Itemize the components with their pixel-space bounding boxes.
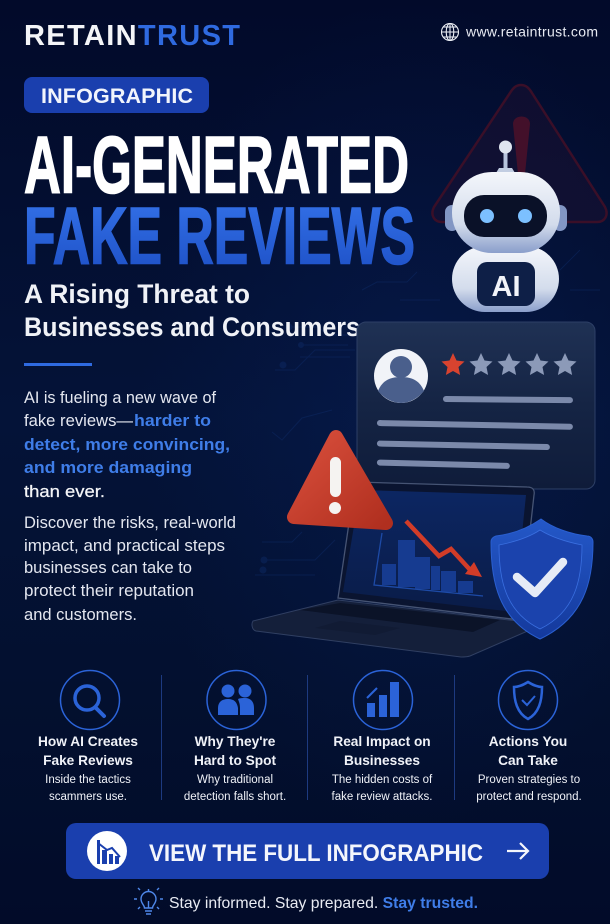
icon: rising bars <box>354 670 412 730</box>
intro text block <box>24 388 230 501</box>
description text block: Discover the risks, real-world <box>24 514 236 532</box>
intro text block: detect, more convincing, <box>24 435 230 454</box>
icon: laptop with falling chart <box>252 482 534 657</box>
description text block: and customers. <box>24 606 137 624</box>
icon: red warning triangle <box>294 437 386 523</box>
feature: why they're hard to spot: Why They're <box>195 734 276 749</box>
feature: actions you can take: Can Take <box>498 753 558 768</box>
website link with globe icon: www.retaintrust.com <box>465 24 598 40</box>
feature: real impact on businesses: The hidden costs of <box>332 774 433 786</box>
icon: light bulb <box>134 888 163 914</box>
feature: why they're hard to spot: detection falls short. <box>184 791 286 803</box>
icon: magnifier <box>60 670 120 730</box>
feature: real impact on businesses: fake review attacks. <box>332 791 432 803</box>
feature: why they're hard to spot: Hard to Spot <box>194 753 276 768</box>
icon: arrow <box>507 843 528 859</box>
logo: RetainTrust: RETAINTRUST <box>24 20 240 52</box>
arrow: falling trend <box>406 521 482 577</box>
icon: robot <box>445 140 567 312</box>
feature: actions you can take <box>476 670 582 803</box>
feature: how AI creates fake reviews: How AI Creates <box>38 734 138 749</box>
intro text block: AI is fueling a new wave of <box>24 388 216 407</box>
icon: people <box>207 670 266 730</box>
badge: infographic <box>24 77 209 113</box>
feature: real impact on businesses: Businesses <box>344 753 420 768</box>
intro text block: and more damaging <box>24 458 192 477</box>
intro text block: harder to <box>134 411 211 430</box>
intro text block: fake reviews— <box>24 411 133 430</box>
feature: actions you can take: Actions You <box>489 734 567 749</box>
feature: how AI creates fake reviews: Fake Reviews <box>43 753 133 768</box>
feature: actions you can take: protect and respond. <box>476 791 582 803</box>
panel: review card <box>357 322 595 489</box>
laptop screen <box>338 482 534 620</box>
intro text block: than ever. <box>24 482 105 501</box>
subtitle <box>24 279 360 342</box>
subtitle: Businesses and Consumers <box>24 312 360 342</box>
icon: avatar <box>374 349 428 403</box>
icon: globe <box>442 24 458 40</box>
bar chart <box>382 540 473 593</box>
description text block <box>24 514 236 624</box>
icon: chart badge <box>87 831 127 871</box>
icon: faint background warning triangle <box>432 85 607 222</box>
button: view the full infographic <box>66 823 549 879</box>
description text block: protect their reputation <box>24 582 194 600</box>
feature: how AI creates fake reviews <box>38 670 138 803</box>
feature: how AI creates fake reviews: scammers use. <box>49 791 127 803</box>
description text block: impact, and practical steps <box>24 537 225 555</box>
icon: robot: AI <box>492 271 520 303</box>
star rating: one of five <box>442 353 576 375</box>
subtitle: A Rising Threat to <box>24 279 250 309</box>
column dividers <box>162 675 454 800</box>
laptop base <box>252 600 530 657</box>
icon: shield check <box>498 670 558 730</box>
divider accent <box>24 363 92 366</box>
badge: infographic: INFOGRAPHIC <box>41 84 193 108</box>
icon: blue shield with check <box>491 519 593 639</box>
feature: why they're hard to spot <box>184 670 286 803</box>
footer tagline <box>134 888 478 914</box>
feature: real impact on businesses: Real Impact on <box>333 734 431 749</box>
review text lines <box>377 396 573 469</box>
feature: why they're hard to spot: Why traditional <box>197 774 273 786</box>
feature: actions you can take: Proven strategies to <box>478 774 580 786</box>
button: view the full infographic: VIEW THE FULL INFOGRAPHIC <box>149 840 483 867</box>
footer tagline: Stay informed. Stay prepared. Stay trusted. <box>169 895 478 912</box>
description text block: businesses can take to <box>24 559 192 577</box>
faint circuit pattern <box>255 250 600 575</box>
feature: real impact on businesses <box>332 670 433 803</box>
feature: how AI creates fake reviews: Inside the tactics <box>45 774 131 786</box>
